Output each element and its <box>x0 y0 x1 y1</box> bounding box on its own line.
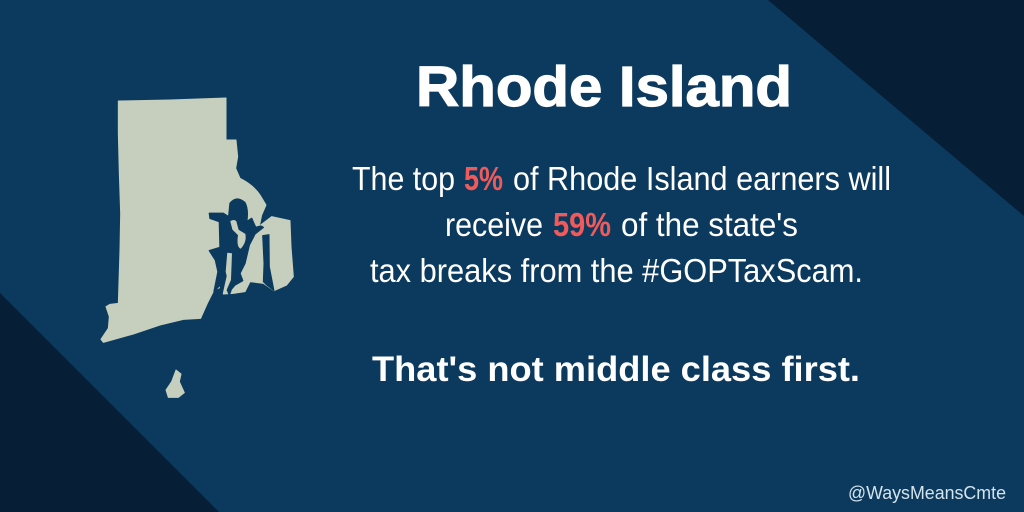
body text: of the state's <box>621 206 798 243</box>
body text: of Rhode Island earners will <box>513 160 891 197</box>
map: Rhode Island <box>101 98 293 397</box>
body text: tax breaks from the #GOPTaxScam. <box>370 252 863 289</box>
body text: The top <box>352 160 455 197</box>
body text <box>352 160 891 289</box>
body text: 59% <box>553 206 611 243</box>
body text: receive <box>445 206 543 243</box>
body text: 5% <box>464 160 503 197</box>
closing statement: That's not middle class first. <box>372 350 860 389</box>
handle: @WaysMeansCmte <box>848 483 1006 503</box>
title: Rhode Island <box>416 55 792 119</box>
